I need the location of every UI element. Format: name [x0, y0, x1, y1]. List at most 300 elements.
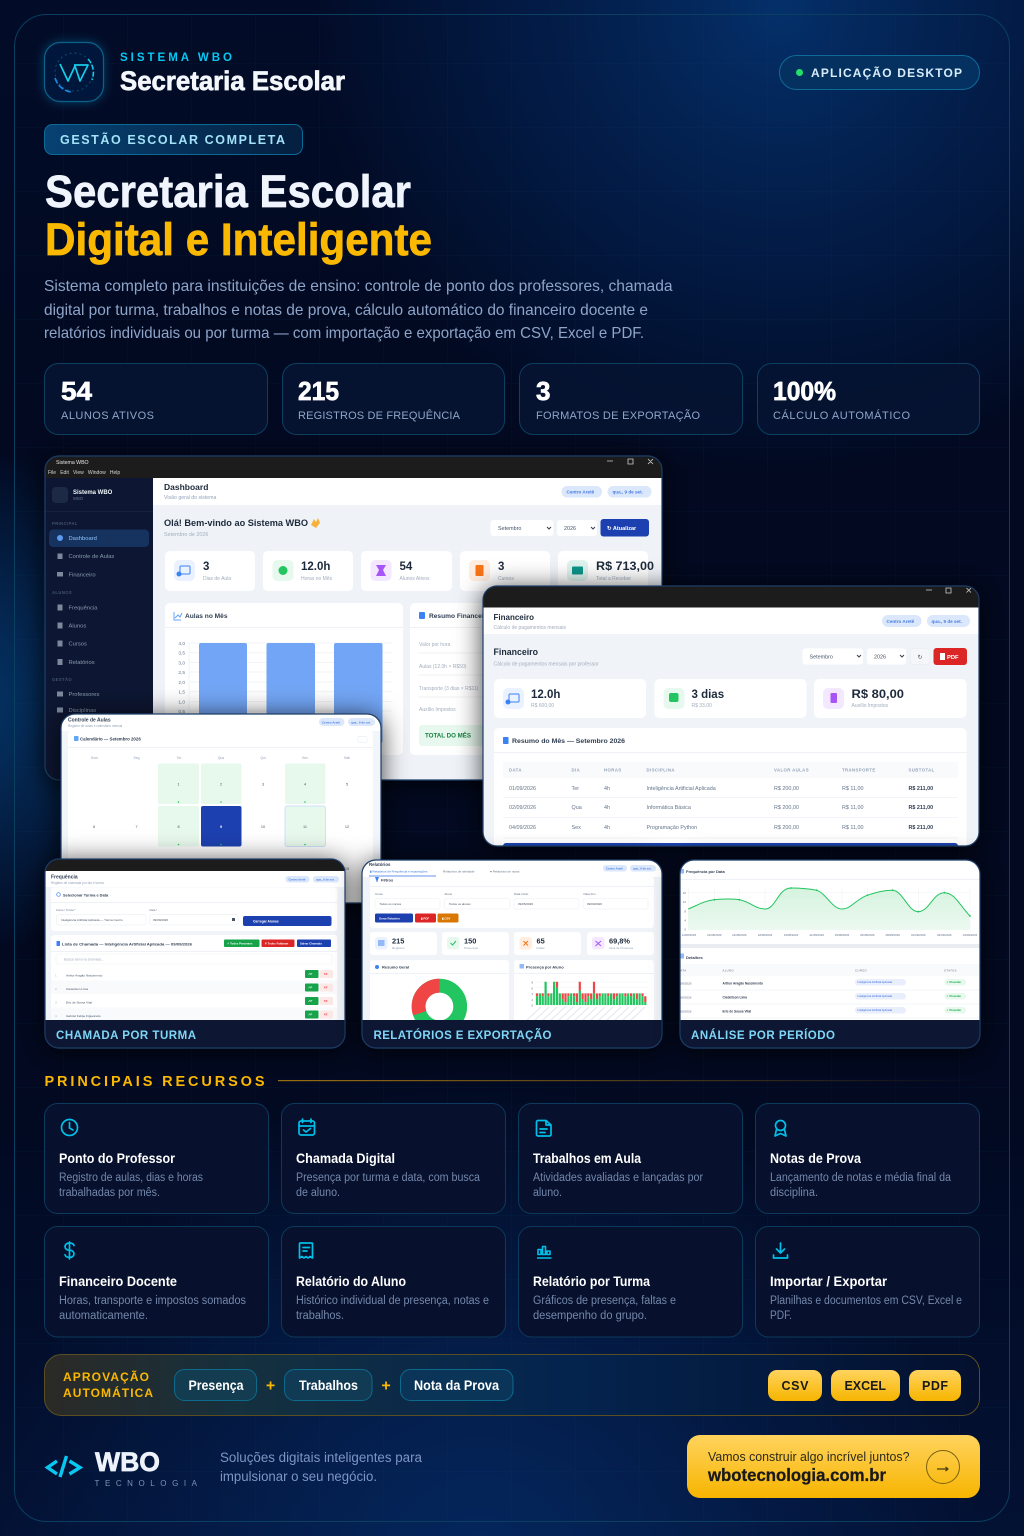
calendar: 9	[220, 825, 222, 829]
filters: ▮ PDF	[421, 916, 429, 920]
table: resumo do mês: Resumo do Mês — Setembro 2026	[512, 738, 625, 745]
caption: ANÁLISE POR PERÍODO	[691, 1029, 835, 1042]
button: pdf: PDF	[922, 1379, 948, 1393]
filters: Aluno	[444, 892, 453, 896]
stat cards: R$ 80,00	[852, 689, 904, 701]
attendance list: ✓P	[308, 999, 312, 1003]
table: detalhes: Inteligência Artificial Aplicada	[858, 1008, 893, 1012]
button: excel: EXCEL	[844, 1379, 886, 1393]
table: resumo do mês: 4h	[604, 805, 610, 811]
controls: Setembro	[810, 654, 833, 660]
stat: alunos: 54	[61, 376, 93, 406]
panel: relatórios e exportação: Centro Aretê	[606, 866, 623, 870]
stat cards: R$ 33,00	[692, 703, 712, 709]
filters: Todos os cursos	[380, 902, 402, 906]
controls: Setembro	[498, 526, 521, 532]
bar chart: aulas no mês: 3,0	[178, 660, 185, 666]
header	[44, 42, 980, 102]
sidebar: GESTÃO	[52, 677, 72, 682]
attendance list: ✕F	[324, 1012, 328, 1016]
button: pdf	[909, 1370, 961, 1401]
line chart: 04/09/2026	[963, 933, 978, 937]
badge: desktop	[780, 56, 980, 90]
panel: financeiro window: Cálculo de pagamentos mensais	[494, 625, 567, 631]
icon: WBO logo	[44, 42, 104, 102]
page header	[153, 478, 662, 505]
attendance list: Arthur Aragão Nascimento	[66, 974, 103, 978]
table: resumo do mês: R$ 211,00	[908, 825, 933, 831]
controls: 2026	[564, 526, 576, 532]
panel: notas de prova: Lançamento de notas e média final da	[770, 1172, 952, 1184]
icon: download	[774, 1243, 788, 1258]
table: resumo do mês: DIA	[572, 768, 580, 772]
panel: chamada digital: Chamada Digital	[296, 1151, 395, 1166]
attendance list: Gabriel Felipe Figueiredo	[66, 1014, 101, 1018]
attendance list: ✕F	[324, 999, 328, 1003]
sidebar: Alunos	[68, 624, 86, 630]
panel: financeiro docente: Financeiro Docente	[59, 1274, 177, 1289]
panel: trabalhos em aula: aluno.	[533, 1187, 562, 1199]
caption: RELATÓRIOS E EXPORTAÇÃO	[374, 1029, 552, 1042]
table: resumo do mês: R$ 200,00	[774, 805, 799, 811]
welcome	[164, 518, 320, 538]
stat cards: Faltas	[536, 946, 545, 950]
form card: Inteligência Artificial Aplicada — Turma Centro	[61, 918, 123, 922]
form card	[51, 888, 337, 931]
table: resumo do mês	[494, 728, 966, 853]
table: resumo do mês: Inteligência Artificial Aplicada	[646, 786, 716, 792]
intro text: Sistema completo para instituições de ensino: controle de ponto dos professores, chamada	[44, 278, 673, 295]
attendance list: 3	[55, 1000, 57, 1004]
controls	[802, 648, 967, 665]
line chart: 8	[684, 910, 686, 914]
table: detalhes: 15/08/2026	[676, 1010, 692, 1014]
stat cards: 3	[498, 561, 504, 573]
icon: receipt	[299, 1243, 312, 1258]
table: detalhes: Eric de Sousa Vital	[722, 1010, 751, 1014]
filters	[370, 877, 654, 928]
label: AUTOMÁTICA	[63, 1385, 153, 1400]
panel: relatórios e exportação	[362, 860, 662, 1048]
stat cards: Auxílio Impostos	[852, 703, 889, 709]
button: excel	[831, 1370, 900, 1401]
caption: CHAMADA POR TURMA	[56, 1030, 196, 1042]
panel: importar / exportar: PDF.	[770, 1310, 792, 1322]
chip: trabalhos	[284, 1370, 372, 1400]
line chart: Frequência por Data	[686, 869, 725, 874]
stat cards: Horas no Mês	[301, 576, 333, 582]
calendar: Qui	[260, 756, 266, 760]
calendar: 2	[220, 782, 222, 786]
table: resumo do mês: 04/09/2026	[509, 825, 536, 831]
card: resumo financeiro: Aulas (12.0h × R$50)	[419, 664, 467, 670]
filters: Data Início	[514, 892, 529, 896]
table: resumo do mês: R$ 211,00	[908, 805, 933, 811]
panel: ponto do professor: trabalhadas por mês.	[59, 1187, 160, 1199]
panel: relatórios e exportação: ▮ Relatórios de Frequência e exportações	[370, 870, 428, 874]
panel: trabalhos em aula: Trabalhos em Aula	[533, 1151, 641, 1166]
attendance list: ✕F	[324, 986, 328, 990]
panel: financeiro window: Financeiro	[494, 613, 534, 622]
stat cards: 65	[536, 936, 545, 946]
panel: trabalhos em aula	[518, 1104, 742, 1214]
stat cards: R$ 600,00	[531, 703, 554, 709]
attendance list: Lista de Chamada — Inteligência Artificial Aplicada — 09/09/2026	[62, 942, 193, 946]
stat cards: 150	[464, 936, 476, 946]
panel: financeiro window	[483, 586, 979, 853]
table: detalhes: Detalhes	[686, 955, 703, 960]
table: detalhes: 15/08/2026	[676, 982, 692, 986]
stat: registros	[282, 364, 504, 434]
filters: Curso	[375, 892, 383, 896]
panel: relatório por turma	[518, 1226, 742, 1337]
stat cards: Total a Receber	[596, 576, 631, 582]
calendar: Sáb	[344, 756, 350, 760]
chip: presença: Presença	[188, 1378, 244, 1393]
stat cards: 215	[392, 936, 404, 946]
attendance list: 2	[55, 987, 57, 991]
card: resumo financeiro: TOTAL DO MÊS	[425, 732, 471, 740]
stat cards: 12.0h	[531, 689, 560, 701]
calendar: Seg	[133, 756, 140, 760]
line chart: 11/08/2026	[682, 933, 697, 937]
stat: cálculo: CÁLCULO AUTOMÁTICO	[773, 409, 910, 422]
panel: financeiro docente: Horas, transporte e impostos somados	[59, 1295, 246, 1307]
calendar: Qua	[218, 756, 224, 760]
panel: notas de prova: Notas de Prova	[770, 1151, 861, 1166]
stacked bar chart: 2	[531, 998, 533, 1002]
table: resumo do mês: 4h	[604, 786, 610, 792]
panel: ponto do professor	[44, 1104, 268, 1214]
calendar: Dom	[91, 756, 98, 760]
table: detalhes	[676, 954, 980, 1018]
attendance list: ✕ Todos Faltaram	[264, 942, 289, 946]
logo: WBO Tecnologia	[48, 1447, 198, 1488]
intro text: digital por turma, trabalhos e notas de prova, cálculo automático do financeiro docente e	[44, 302, 648, 319]
stat cards: 69,8%	[609, 936, 630, 946]
attendance list: Eric de Sousa Vital	[66, 1000, 92, 1004]
calendar: 1	[177, 782, 180, 786]
plus: +	[381, 1378, 391, 1394]
tagline: impulsionar o seu negócio.	[220, 1469, 377, 1484]
chip: nota da prova	[400, 1370, 513, 1400]
line chart: 16	[683, 891, 686, 895]
line chart: 0	[684, 928, 686, 932]
filters: 09/05/2026	[518, 902, 533, 906]
stat cards	[370, 932, 654, 955]
line chart: 01/09/2026	[911, 933, 926, 937]
caption	[362, 1020, 662, 1048]
sidebar: Cursos	[68, 642, 87, 648]
calendar: 11	[303, 825, 307, 829]
stat: registros: 215	[298, 376, 339, 406]
sidebar: Dashboard	[68, 536, 97, 542]
table: resumo do mês: R$ 211,00	[908, 786, 933, 792]
section heading: PRINCIPAIS RECURSOS	[44, 1074, 265, 1090]
panel: financeiro window: Centro Aretê	[886, 619, 915, 624]
bar chart: aulas no mês: 4,0	[178, 641, 185, 647]
logo: WBO Tecnologia: TECNOLOGIA	[94, 1479, 198, 1488]
panel: relatório por turma: Gráficos de presença, faltas e	[533, 1295, 676, 1307]
attendance list: Cledeilson Lima	[66, 987, 88, 991]
table: resumo do mês: VALOR AULAS	[774, 768, 809, 772]
table: resumo do mês: R$ 11,00	[842, 805, 863, 811]
panel: financeiro window: Financeiro	[494, 647, 539, 657]
table: resumo do mês: DISCIPLINA	[646, 768, 675, 772]
attendance list	[51, 935, 337, 1025]
stats row	[44, 364, 980, 434]
table: detalhes: 15/08/2026	[676, 996, 692, 1000]
sidebar: Disciplinas	[68, 708, 96, 714]
sidebar: Financeiro	[68, 572, 96, 578]
bar chart: aulas no mês: 2,5	[178, 670, 185, 676]
panel: relatórios e exportação: Relatórios	[369, 862, 391, 867]
intro text: relatórios individuais ou por turma — com importação e exportação em CSV, Excel e PDF.	[44, 325, 644, 342]
sidebar: WBO	[73, 496, 84, 501]
panel: análise por período	[676, 860, 980, 1048]
panel: relatório por turma: Relatório por Turma	[533, 1274, 650, 1289]
line chart: 26/08/2026	[860, 933, 875, 937]
stat cards: R$ 713,00	[596, 561, 654, 573]
form card: Carregar Alunos	[253, 920, 279, 924]
line chart: 18/08/2026	[758, 933, 773, 937]
card: resumo financeiro: Resumo Financeiro	[429, 613, 490, 620]
controls: ↻	[917, 654, 923, 661]
form card: Data *	[150, 908, 158, 912]
stat: cálculo: 100%	[773, 376, 836, 406]
plus: +	[266, 1378, 275, 1394]
stacked bar chart: Presença por Aluno	[526, 964, 564, 970]
panel: ponto do professor: Ponto do Professor	[59, 1151, 176, 1166]
stat: formatos: FORMATOS DE EXPORTAÇÃO	[536, 409, 700, 422]
table: resumo do mês: R$ 11,00	[842, 786, 863, 792]
panel: chamada por turma: Centro Aretê	[288, 878, 306, 882]
panel: chamada por turma: Frequência	[51, 874, 78, 880]
filters: Todos os alunos	[449, 902, 471, 906]
stacked bar chart: 8	[531, 980, 533, 984]
icon: dollar	[65, 1242, 74, 1259]
table: detalhes: CURSO	[855, 968, 867, 972]
panel: dashboard window: File Edit View Window Help	[48, 470, 120, 476]
panel: controle de aulas window: Centro Aretê	[322, 720, 340, 724]
icon: medal	[775, 1120, 786, 1136]
call to action	[687, 1435, 980, 1498]
calendar: 10	[261, 825, 265, 829]
title	[45, 166, 432, 265]
attendance list: ✓P	[308, 986, 312, 990]
badge: desktop: APLICAÇÃO DESKTOP	[811, 65, 962, 80]
stat: cálculo	[758, 364, 980, 434]
sidebar: Relatórios	[68, 660, 95, 666]
title: Secretaria Escolar	[45, 166, 411, 217]
calendar: 3	[262, 782, 264, 786]
page header: qua., 9 de set.	[612, 490, 643, 494]
app name: Secretaria Escolar	[120, 66, 345, 96]
line chart: 28/08/2026	[885, 933, 900, 937]
stacked bar chart: 0	[531, 1004, 533, 1008]
stacked bar chart: 4	[531, 992, 533, 996]
line chart: 02/09/2026	[937, 933, 952, 937]
panel: controle de aulas window: Registro de aulas e calendário mensal	[68, 724, 123, 728]
stat cards: Alunos Ativos	[400, 576, 430, 582]
bar chart: aulas no mês	[165, 603, 403, 755]
table: detalhes: ✓ Presente	[946, 994, 961, 998]
calendar: 6	[93, 825, 95, 829]
call to action: Vamos construir algo incrível juntos?	[708, 1450, 910, 1464]
controls: 2026	[874, 654, 886, 660]
sidebar: Frequência	[68, 606, 98, 612]
label	[63, 1369, 153, 1400]
bar chart: aulas no mês: 1,5	[178, 690, 185, 696]
stat cards: Cursos	[498, 576, 514, 582]
table: resumo do mês: SUBTOTAL	[908, 768, 935, 772]
line chart	[680, 869, 980, 948]
line chart: 12/08/2026	[707, 933, 722, 937]
table: detalhes: Cledeilson Lima	[722, 996, 747, 1000]
icon: clock	[62, 1120, 78, 1136]
calendar: 5	[346, 782, 348, 786]
filters: 09/09/2026	[587, 902, 602, 906]
hero	[44, 124, 673, 342]
sidebar	[45, 478, 153, 780]
panel: chamada digital	[282, 1104, 506, 1214]
sidebar: ALUNOS	[52, 590, 72, 595]
sidebar: Professores	[68, 692, 100, 698]
panel: chamada por turma	[45, 859, 345, 1048]
footer	[48, 1435, 980, 1498]
attendance list: 4	[55, 1014, 57, 1018]
calendar: 19	[345, 867, 349, 871]
form card: 09/09/2026	[153, 918, 168, 922]
bar chart: aulas no mês: 3,5	[178, 651, 185, 657]
panel: importar / exportar: Planilhas e documentos em CSV, Excel e	[770, 1295, 962, 1307]
panel: importar / exportar	[756, 1226, 980, 1337]
table: resumo do mês: R$ 200,00	[774, 825, 799, 831]
call to action: wbotecnologia.com.br	[707, 1465, 886, 1485]
attendance list: 1	[55, 974, 57, 978]
panel: chamada por turma: Registro de chamada por dia e turma	[51, 881, 104, 885]
icon: calendar	[299, 1119, 314, 1135]
card: resumo financeiro	[410, 603, 482, 755]
panel: relatórios e exportação: qua., 9 de set.	[633, 866, 652, 870]
bar chart: aulas no mês: 2,0	[178, 680, 185, 686]
panel: controle de aulas window: Controle de Aulas	[68, 718, 111, 724]
table: detalhes: Inteligência Artificial Aplicada	[858, 980, 893, 984]
panel: notas de prova: disciplina.	[770, 1187, 818, 1199]
panel: dashboard window	[45, 456, 662, 780]
panel: relatórios e exportação: Relatórios de atividade	[443, 870, 475, 874]
donut chart: Resumo Geral	[382, 964, 409, 970]
stat cards: Registros	[392, 946, 405, 950]
form card: Selecionar Turma e Data	[63, 892, 109, 898]
tag: GESTÃO ESCOLAR COMPLETA	[60, 132, 285, 147]
table: resumo do mês: HORAS	[604, 768, 622, 772]
table: detalhes: STATUS	[944, 968, 957, 972]
stat cards: 12.0h	[301, 561, 330, 573]
controls: ↻ Atualizar	[607, 525, 637, 532]
attendance list: ✓P	[308, 1012, 312, 1016]
table: detalhes: Arthur Aragão Nascimento	[722, 982, 763, 986]
controls	[490, 519, 649, 536]
stat cards	[494, 679, 966, 718]
stat: formatos: 3	[536, 376, 550, 406]
calendar: Ter	[177, 756, 182, 760]
panel: relatório do aluno: trabalhos.	[296, 1310, 344, 1322]
stat: formatos	[520, 364, 742, 434]
table: detalhes: ✓ Presente	[946, 1008, 961, 1012]
panel: chamada digital: Presença por turma e data, com busca	[296, 1172, 481, 1184]
table: detalhes: DATA	[678, 968, 686, 972]
table: resumo do mês: Qua	[572, 805, 582, 811]
table: resumo do mês: Sex	[572, 825, 581, 831]
table: detalhes: ALUNO	[722, 968, 734, 972]
card: resumo financeiro: Transporte (3 dias × R$11)	[419, 686, 479, 692]
panel: ponto do professor: Registro de aulas, dias e horas	[59, 1172, 203, 1184]
caption	[45, 1020, 345, 1048]
panel: financeiro window: Cálculo de pagamentos mensais por professor	[494, 662, 599, 668]
table: resumo do mês: Programação Python	[646, 825, 697, 831]
label: APROVAÇÃO	[63, 1369, 149, 1384]
filters: Data Fim	[584, 892, 596, 896]
tagline: Soluções digitais inteligentes para	[220, 1450, 422, 1465]
table: resumo do mês: 02/09/2026	[509, 805, 536, 811]
form card: Curso / Turma *	[56, 908, 76, 912]
table: resumo do mês: 4h	[604, 825, 610, 831]
button: csv	[768, 1370, 822, 1401]
attendance list: Salvar Chamada	[300, 942, 322, 946]
filters: Filtros	[381, 878, 394, 882]
bar chart: aulas no mês: 1,0	[178, 700, 185, 706]
stat: registros: REGISTROS DE FREQUÊNCIA	[298, 409, 461, 422]
table: resumo do mês: Informática Básica	[646, 805, 691, 811]
stat cards: 3 dias	[692, 689, 724, 701]
welcome: Olá! Bem-vindo ao Sistema WBO	[164, 518, 308, 528]
line chart: 12	[683, 900, 686, 904]
line chart: 4	[684, 918, 686, 922]
calendar: 4	[304, 782, 306, 786]
icon: bars	[537, 1246, 552, 1258]
panel: dashboard window: Sistema WBO	[56, 460, 89, 466]
page header: Visão geral do sistema	[164, 495, 216, 501]
card: resumo financeiro: Auxílio Impostos	[419, 707, 456, 713]
line chart: 14/08/2026	[732, 933, 747, 937]
chip: nota da prova: Nota da Prova	[414, 1378, 499, 1393]
stat cards: Dias de Aula	[203, 576, 231, 582]
sidebar: Sistema WBO	[73, 490, 113, 496]
table: resumo do mês: Ter	[572, 786, 579, 792]
card: resumo financeiro: Valor por hora	[419, 642, 451, 648]
sidebar: Controle de Aulas	[68, 554, 114, 560]
panel: relatório do aluno: Relatório do Aluno	[296, 1274, 406, 1289]
calendar: 7	[135, 825, 138, 829]
attendance list: ✓ Todos Presentes	[227, 942, 253, 946]
attendance list: ✕F	[324, 972, 328, 976]
calendar	[68, 731, 373, 903]
stat: alunos	[44, 364, 268, 434]
stat cards: Taxa de Presença	[609, 946, 633, 950]
controls: PDF	[947, 655, 959, 661]
table: detalhes: Inteligência Artificial Aplicada	[858, 994, 893, 998]
panel: aprovação automática	[44, 1354, 980, 1416]
panel: financeiro window: qua., 9 de set.	[932, 619, 962, 624]
panel: relatório por turma: desempenho do grupo.	[533, 1310, 647, 1322]
panel: chamada por turma: qua., 9 de set.	[316, 878, 335, 882]
table: resumo do mês: 01/09/2026	[509, 786, 536, 792]
calendar: Calendário — Setembro 2026	[80, 736, 141, 742]
icon: arrow	[926, 1450, 960, 1484]
bar chart: aulas no mês: Aulas no Mês	[185, 613, 228, 620]
tag	[44, 124, 302, 154]
